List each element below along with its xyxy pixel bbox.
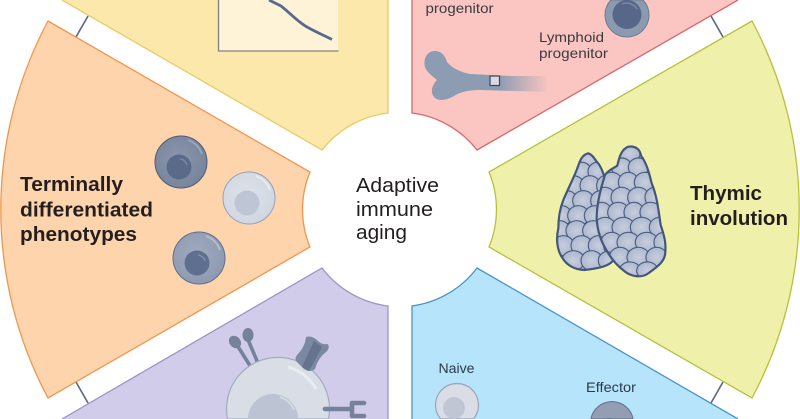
panel shape <box>412 0 738 150</box>
icon: medium cell <box>173 232 225 284</box>
thymus left lobe <box>556 152 614 272</box>
receptor: paired spoons <box>226 328 260 372</box>
panel: orange, terminally differentiated phenotypes <box>1 21 310 398</box>
icon: pale cell <box>223 172 275 224</box>
panel shape <box>489 21 799 398</box>
label: lymphoid progenitor: progenitor <box>539 45 608 61</box>
heading: thymic involution: Thymic <box>690 183 762 205</box>
panel: green, thymic involution <box>489 21 799 398</box>
heading: terminally differentiated phenotypes <box>20 174 153 246</box>
icon: lymphoid progenitor cell <box>605 0 649 37</box>
connector: top left <box>76 16 88 37</box>
panel shape <box>62 0 388 150</box>
nucleus <box>248 394 298 419</box>
panel shape <box>412 268 738 419</box>
heading: terminally differentiated phenotypes: Terminally <box>20 174 124 196</box>
cell body <box>226 357 330 419</box>
icon: dark cell <box>155 136 207 188</box>
heading: terminally differentiated phenotypes: phenotypes <box>20 224 137 246</box>
receptor: dark dimer <box>296 336 329 371</box>
icon: thymus <box>556 145 667 278</box>
central label: adaptive immune aging: immune <box>356 198 433 221</box>
panel: purple, cell surface receptors <box>62 268 388 419</box>
label: lymphoid progenitor <box>539 29 608 61</box>
connector: bottom right <box>711 382 723 403</box>
panel shape <box>1 21 310 398</box>
thymus right lobe <box>596 145 667 278</box>
line chart <box>218 0 338 51</box>
heading: thymic involution <box>690 183 788 230</box>
label: lymphoid progenitor: Lymphoid <box>539 29 604 45</box>
icon: cell with receptors <box>226 328 364 419</box>
receptor: fork <box>325 403 364 416</box>
icon: naive cell <box>435 383 478 419</box>
icon: effector cell <box>591 402 633 419</box>
panel shape <box>62 268 388 419</box>
label: progenitor: progenitor <box>426 0 494 16</box>
central label: adaptive immune aging <box>356 174 439 244</box>
panel: pink, hematopoietic progenitors <box>412 0 738 150</box>
label: naive: Naive <box>438 360 475 376</box>
connector: top right <box>711 16 723 37</box>
central label: adaptive immune aging: Adaptive <box>356 174 439 197</box>
panel: blue, naive and effector cells <box>412 268 738 419</box>
heading: terminally differentiated phenotypes: differentiated <box>20 200 153 222</box>
heading: thymic involution: involution <box>690 208 788 230</box>
panel: yellow, declining function <box>62 0 388 150</box>
icon: bone with marrow inset <box>424 51 549 100</box>
central label: adaptive immune aging: aging <box>356 221 407 244</box>
label: effector: Effector <box>586 379 636 395</box>
connector: bottom left <box>76 382 88 403</box>
